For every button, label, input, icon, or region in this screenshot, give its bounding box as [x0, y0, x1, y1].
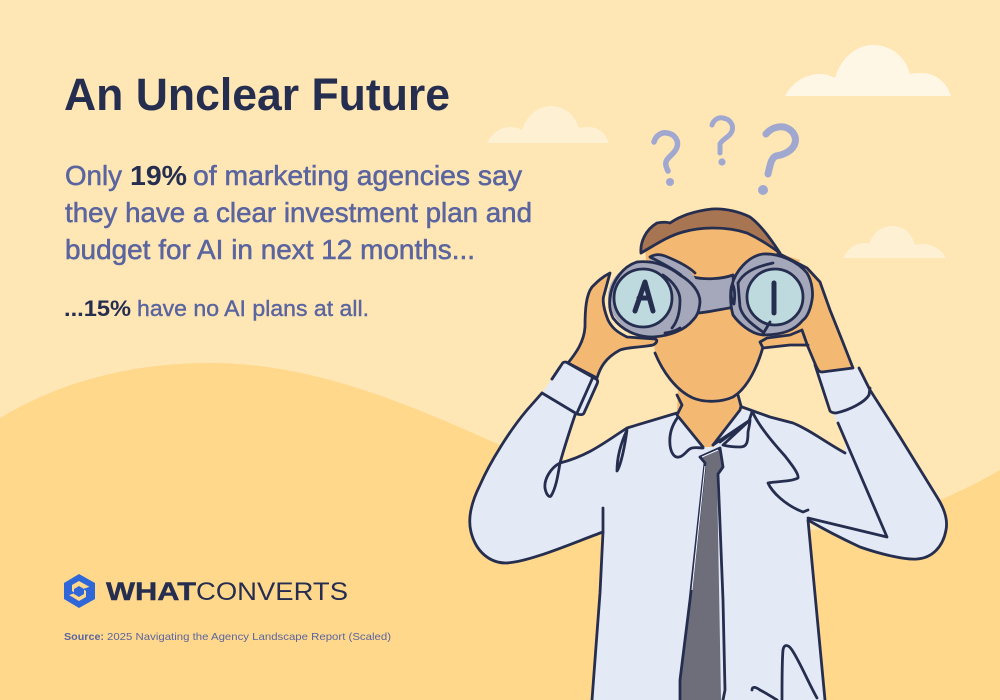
cloud: middle: [487, 106, 609, 143]
icon: logo hexagon: [64, 574, 95, 608]
shirt outline: [470, 368, 947, 700]
secondary statistic: have no AI plans at all.: [137, 296, 369, 321]
neck: [677, 390, 740, 447]
right barrel: [731, 254, 812, 335]
wordmark: WHAT: [106, 578, 196, 606]
statistic text block: of marketing agencies say: [193, 160, 522, 191]
left cuff: [542, 362, 598, 415]
letter A: [635, 282, 653, 311]
statistic text block: Only: [65, 160, 122, 191]
letter I: [772, 283, 776, 313]
hair: [641, 209, 780, 253]
shirt: [470, 368, 947, 700]
right hand outline: [760, 253, 853, 372]
secondary statistic: ...15%: [64, 296, 131, 321]
left barrel: [608, 255, 699, 337]
statistic text block: [65, 160, 532, 265]
neck outline: [677, 395, 741, 447]
tie: [680, 448, 725, 700]
left lens: [615, 270, 671, 326]
collar: [670, 412, 752, 457]
statistic text block: budget for AI in next 12 months...: [65, 234, 475, 265]
left hand: [568, 273, 657, 378]
source note: 2025 Navigating the Agency Landscape Report (Scaled): [107, 631, 391, 643]
wordmark: CONVERTS: [196, 578, 348, 606]
background hill: [0, 363, 1000, 700]
right hand: [760, 253, 853, 372]
cloud: small: [843, 226, 946, 258]
cloud: large: [785, 45, 951, 96]
face: [645, 228, 781, 401]
question marks: [654, 118, 795, 195]
bridge: [693, 275, 735, 313]
right lens: [748, 270, 802, 324]
finger tick: [763, 322, 770, 334]
wordmark: [106, 578, 348, 606]
illustration: man with binoculars: [470, 209, 947, 700]
binoculars: [608, 254, 812, 337]
source note: Source:: [64, 631, 104, 643]
statistic text block: 19%: [130, 160, 187, 191]
face outline: [655, 347, 763, 401]
right cuff: [815, 365, 870, 413]
title: An Unclear Future: [64, 69, 450, 120]
logo: WhatConverts: [64, 574, 348, 608]
statistic text block: they have a clear investment plan and: [65, 197, 532, 228]
